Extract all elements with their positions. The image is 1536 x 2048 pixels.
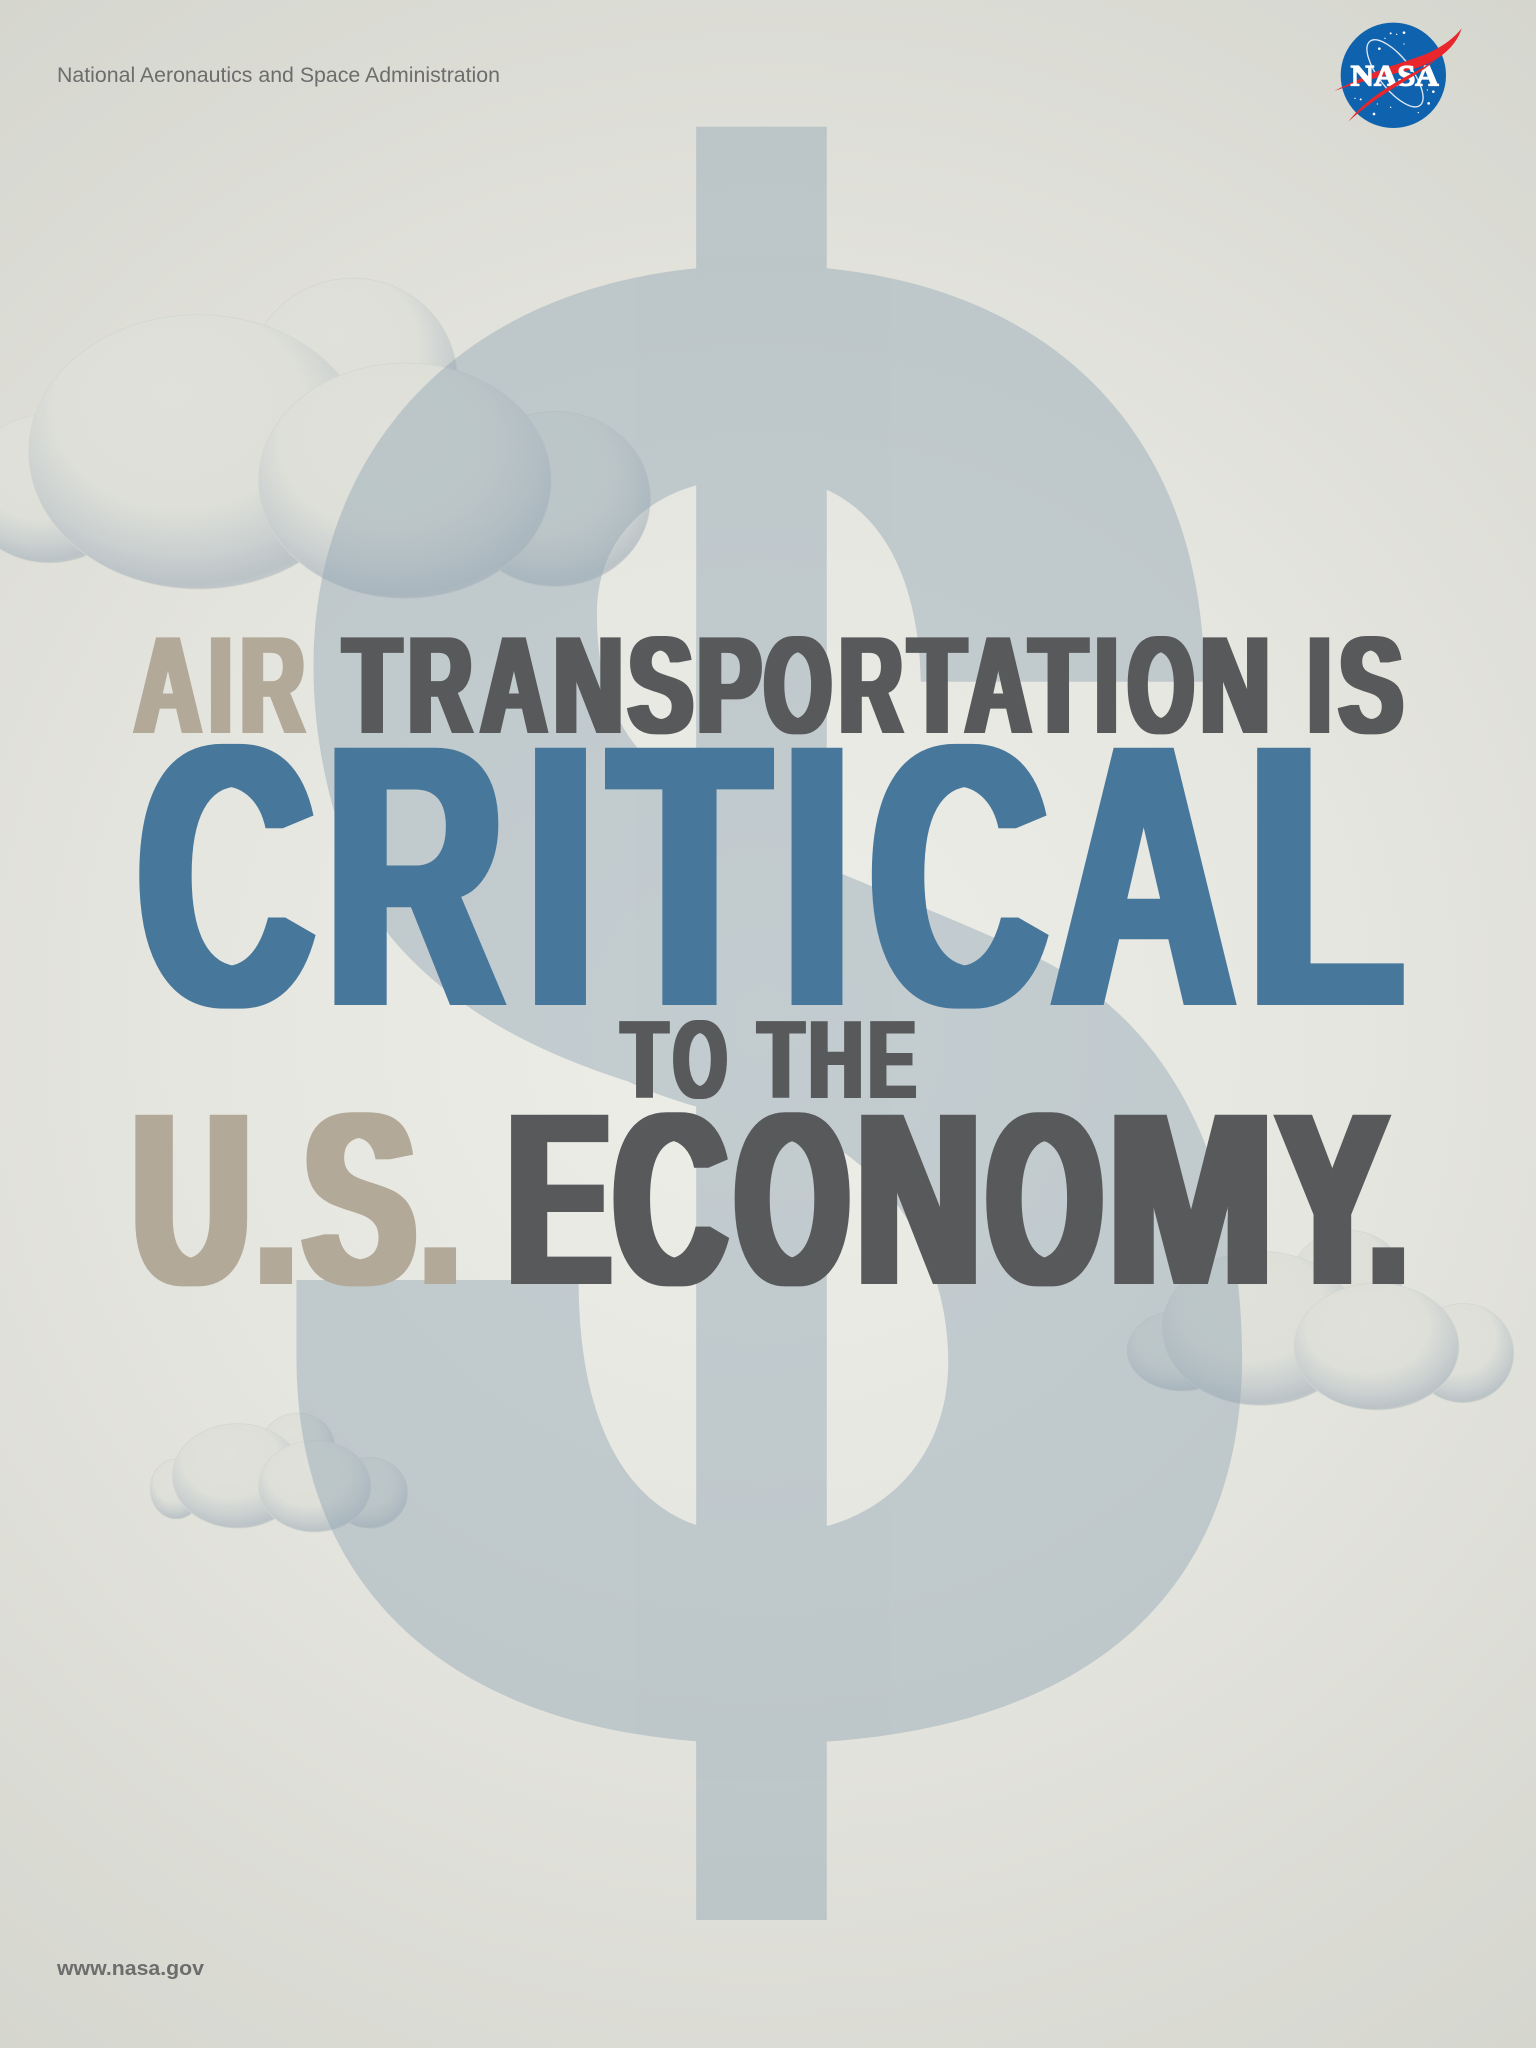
headline line 1: R: [408, 608, 472, 763]
headline line 4: U: [133, 1062, 250, 1337]
headline line 4: .: [258, 1062, 294, 1337]
headline line 1: A: [966, 608, 1031, 763]
headline line 1: R: [240, 608, 304, 763]
headline line 1: O: [764, 608, 831, 763]
headline line 1: O: [1128, 608, 1194, 763]
headline line 1: A: [481, 608, 547, 763]
website: www.nasa.gov: [56, 1957, 205, 1980]
headline line 2: C: [870, 667, 1047, 1085]
headline line 2: C: [138, 667, 314, 1085]
headline line 1: T: [344, 608, 401, 763]
headline: [133, 608, 1406, 1337]
headline line 1: S: [628, 608, 693, 763]
headline line 4: C: [614, 1062, 726, 1337]
headline line 1: I: [1096, 608, 1117, 763]
cloud: right: [1127, 1230, 1514, 1410]
headline line 1: T: [909, 608, 966, 763]
headline line 2: T: [611, 667, 768, 1085]
headline line 4: .: [1371, 1062, 1406, 1337]
headline line 1: N: [554, 608, 623, 763]
headline line 4: O: [987, 1062, 1102, 1337]
icon: NASA logo: [1334, 23, 1462, 128]
headline line 2: R: [327, 667, 503, 1085]
headline line 2: A: [1052, 667, 1235, 1085]
headline line 4: N: [857, 1062, 980, 1337]
headline line 2: I: [784, 667, 850, 1085]
headline line 1: [134, 608, 1403, 763]
headline line 1: A: [134, 608, 201, 763]
headline line 1: P: [697, 608, 761, 763]
headline line 1: I: [210, 608, 232, 763]
icon: NASA logo: NASA: [1351, 60, 1439, 92]
headline line 4: O: [736, 1062, 849, 1337]
headline line 1: N: [1200, 608, 1270, 763]
headline line 3: O: [673, 998, 727, 1122]
headline line 2: L: [1249, 667, 1403, 1085]
headline line 4: Y: [1277, 1062, 1387, 1337]
dollar sign: [296, 127, 1242, 1920]
headline line 2: I: [528, 667, 593, 1085]
cloud: small lower left: [150, 1413, 408, 1532]
headline line 4: E: [508, 1062, 610, 1337]
headline line 3: T: [758, 998, 804, 1122]
headline line 4: S: [303, 1062, 416, 1337]
headline line 4: M: [1108, 1062, 1273, 1337]
headline line 1: I: [1308, 608, 1330, 763]
headline line 1: S: [1339, 608, 1403, 763]
headline line 4: [133, 1062, 1406, 1337]
agency name: National Aeronautics and Space Administration: [57, 63, 500, 87]
headline line 1: R: [839, 608, 902, 763]
headline line 3: H: [809, 998, 863, 1122]
headline line 1: T: [1030, 608, 1087, 763]
headline line 3: T: [621, 998, 668, 1122]
headline line 4: .: [423, 1062, 458, 1337]
headline line 3: E: [868, 998, 916, 1122]
cloud: large upper left: [0, 278, 650, 598]
